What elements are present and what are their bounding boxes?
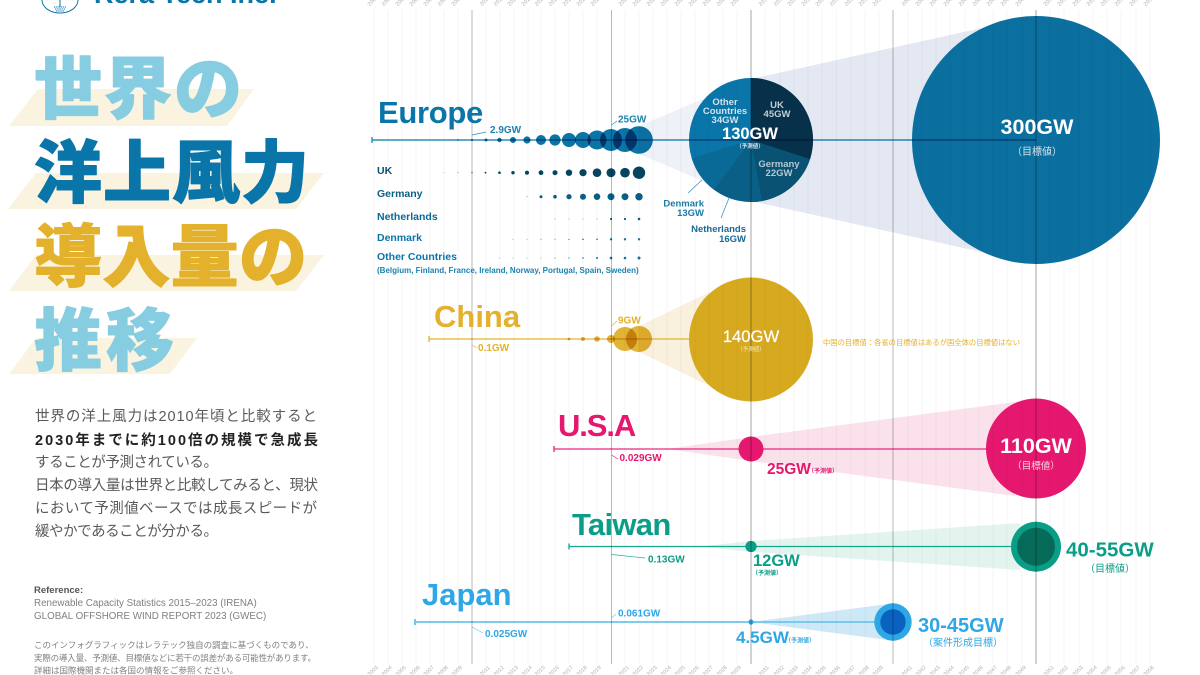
country dot rows [444,166,645,260]
reference [34,585,266,622]
value: 25GW: （予測値） [808,467,838,475]
reference: GLOBAL OFFSHORE WIND REPORT 2023 (GWEC) [34,611,266,622]
labels: U.S.A [558,408,1073,478]
pie labels: 130GW [722,125,778,143]
heading: Europe: Europe [378,95,483,130]
value: 12GW: 12GW [753,552,800,570]
chart: China [429,278,813,402]
value labels: timeline [490,114,647,136]
fan shapes behind the chart [639,16,1036,640]
value: 0.13GW: 0.13GW [648,554,685,566]
labels: Taiwan [572,507,1154,577]
reference: Reference: [34,585,83,596]
title line 2: 洋上風力 [34,136,309,212]
pie labels: UK [770,100,784,111]
value: 4.5GW: 4.5GW [736,628,790,647]
pie labels: Countries [703,106,747,117]
intro text: することが予測されている。 [35,454,218,471]
value: 0.029GW: 0.029GW [620,453,662,464]
U.S.A timeline [554,446,1036,452]
Europe 300GW circle [912,16,1160,264]
country row labels: Denmark [377,232,422,244]
pie outside labels: 13GW [677,208,704,219]
value: 300GW: （目標値） [1012,145,1062,158]
value: 4.5GW [736,628,815,647]
pie labels: 34GW [712,115,738,126]
pie outside labels: 16GW [719,234,746,245]
intro text: 2030年までに約100倍の規模で急成長 [35,431,318,449]
pie outside labels [663,198,746,245]
country row labels: Netherlands [377,211,438,223]
value: 110GW: 110GW [1000,434,1073,458]
value labels: 9GW [618,316,641,326]
pie labels: （予測値） [736,142,764,150]
Europe total circles [457,126,653,154]
U.S.A 25GW circle [738,436,764,462]
pie outside labels: Netherlands [691,224,746,235]
value: 40-55GW: 40-55GW [1066,538,1154,562]
title line 1: 世界の [34,52,242,128]
value labels: 0.061GW [618,608,661,620]
China circles [568,326,652,352]
chart: U.S.A [554,398,1086,498]
Japan timeline [415,619,893,625]
labels: Europe [377,95,1074,275]
disclaimer [34,640,316,675]
pie outside labels: Denmark [663,198,705,210]
value: 25GW [767,461,838,478]
country row labels: Other Countries [377,251,457,263]
value labels: 0.1GW [478,343,510,354]
note: 中国の目標値：各省の目標値はあるが国全体の目標値はない [823,338,1020,347]
country row labels: (Belgium, Finland, France, Ireland, Norway, Portugal, Spain, Sweden) [377,266,639,275]
year axis: top [367,0,1156,8]
value labels [485,608,661,640]
year axis: bottom [367,665,1156,675]
value: 40-55GW: （目標値） [1085,562,1135,575]
value: 110GW [1000,434,1073,472]
pie labels: Other [712,97,738,108]
disclaimer: 実際の導入量、予測値、目標値などに若干の誤差がある可能性があります。 [34,653,316,663]
labels: China [434,299,1020,354]
title line 3: 導入量の [34,220,307,296]
value: 12GW [752,552,800,577]
leader lines [472,121,729,633]
reference: Renewable Capacity Statistics 2015–2023 (IRENA) [34,598,257,609]
labels: Japan [422,577,1004,649]
value: 300GW: 300GW [1001,115,1074,139]
value: 30-45GW [918,615,1004,649]
value labels: timeline: 2.9GW [490,125,522,136]
value labels: timeline: 25GW [618,114,647,126]
title line 4: 推移 [34,304,174,380]
heading: Taiwan: Taiwan [572,507,671,542]
Taiwan 40-55GW circles [1011,522,1061,572]
value: 300GW [1001,115,1074,158]
chart: Taiwan [569,522,1061,572]
intro text [35,408,318,540]
pie labels: Germany [758,159,800,170]
value: 40-55GW [1066,538,1154,575]
Japan 4.5GW circle [748,619,754,625]
heading: China: China [434,299,521,334]
value: 140GW: （予測値） [737,345,765,353]
panel: title and intro [8,0,324,675]
major year labels [458,673,1050,675]
Europe 130GW pie chart [689,78,813,202]
value: 12GW: （予測値） [752,569,782,577]
Taiwan 12GW circle [745,541,757,552]
chart: Europe [372,16,1160,264]
value labels [478,316,641,354]
value: 25GW: 25GW [767,461,811,478]
China timeline [429,336,751,342]
value: 30-45GW: （案件形成目標） [923,636,1003,649]
logo [42,0,277,13]
pie labels: 22GW [766,168,792,179]
Taiwan timeline [569,544,1036,550]
country row labels: Germany [377,188,423,200]
heading: Japan: Japan [422,577,512,612]
value labels: 0.025GW [485,629,528,640]
intro text: において予測値ベースでは成長スピードが [35,500,318,517]
value: 140GW: 140GW [723,327,780,346]
chart: Japan [415,603,912,641]
value: 4.5GW: （予測値） [785,636,815,644]
value: 30-45GW: 30-45GW [918,615,1004,637]
intro text: 日本の導入量は世界と比較してみると、現状 [35,477,318,494]
intro text: 世界の洋上風力は2010年頃と比較すると [35,408,317,425]
China 140GW circle [689,278,813,402]
U.S.A 110GW circle [986,398,1086,498]
country row labels: UK [377,165,393,177]
Japan 30-45GW circles [874,603,912,641]
pie labels [703,97,800,179]
country row labels [377,165,639,275]
value: 110GW: （目標値） [1012,460,1060,472]
disclaimer: このインフォグラフィックはレラテック独自の調査に基づくものであり、 [34,640,314,650]
Europe timeline [372,137,1036,143]
intro text: 緩やかであることが分かる。 [35,523,218,540]
heading: U.S.A: U.S.A [558,408,636,443]
pie labels: 45GW [764,109,790,120]
